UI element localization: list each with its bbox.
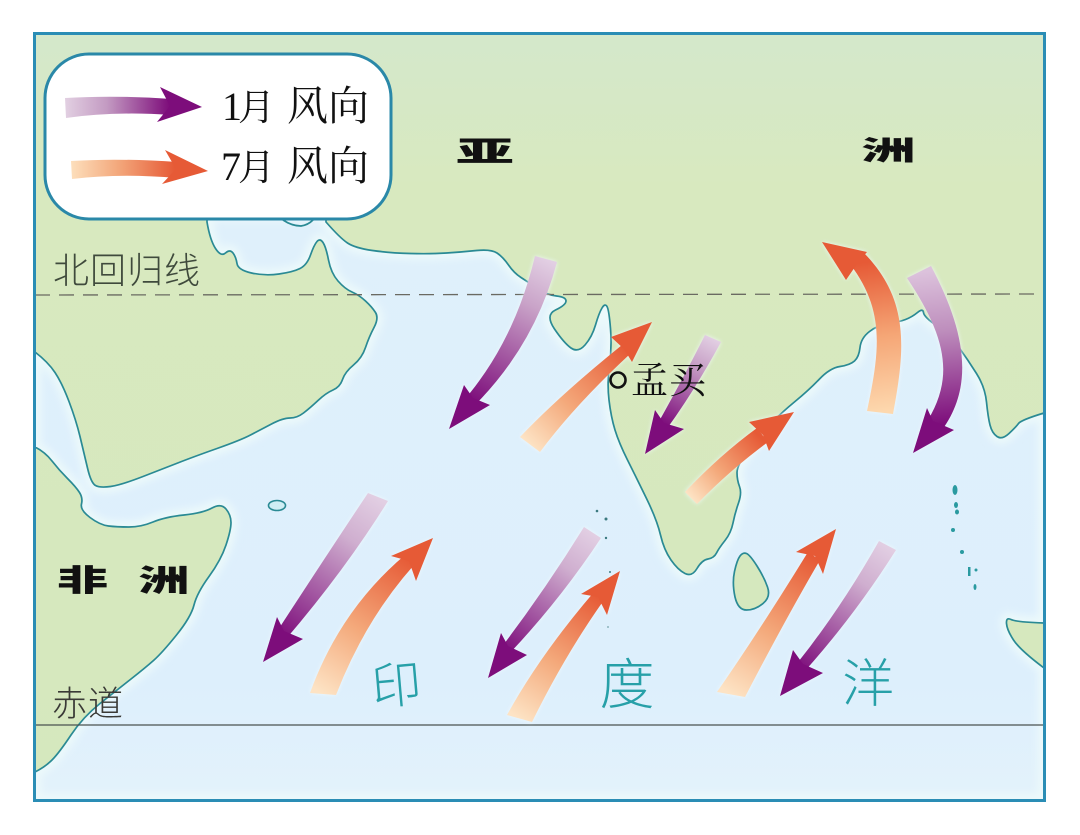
island: Socotra — [268, 500, 286, 510]
arrow: January wind, Arabian Sea north — [449, 256, 557, 429]
arrow: January wind, central Indian Ocean — [488, 527, 601, 678]
legend text: July wind direction: 风向 — [287, 143, 369, 189]
label: Africa: 洲 — [138, 564, 190, 597]
arrow: July wind curving into Bay of Bengal north — [822, 242, 901, 414]
panel: legend — [45, 54, 391, 219]
arrow: July wind, west Indian Ocean — [310, 538, 433, 695]
islands: Laccadive dots — [596, 510, 611, 628]
arrow: July wind toward Mumbai — [520, 322, 652, 452]
marker: Mumbai — [610, 372, 626, 388]
arrow: January wind curving down Bay of Bengal east — [907, 266, 962, 453]
label: Asia (right glyph): 洲 — [861, 136, 916, 166]
islands: Andaman and Nicobar — [951, 485, 978, 590]
arrow: January wind, east Indian Ocean — [780, 541, 896, 696]
legend text: July wind direction: 月 — [238, 148, 275, 189]
legend arrow: January wind — [65, 87, 202, 122]
label: Indian Ocean (印): 印 — [369, 656, 424, 716]
legend text: July wind direction: 7 — [221, 144, 241, 189]
arrow: January wind over India — [645, 335, 721, 454]
arrow: January wind, west Indian Ocean — [263, 493, 388, 662]
legend arrow: July wind — [71, 150, 208, 184]
label: Africa — [57, 564, 190, 597]
equator line — [35, 724, 1043, 726]
legend text: January wind direction: 月 — [238, 88, 275, 129]
label: tropic of cancer: 北回归线 — [53, 250, 200, 291]
label: Indian Ocean (度): 度 — [599, 654, 655, 716]
tropic of cancer dashed line — [35, 294, 1043, 295]
legend text: January wind direction: 风向 — [287, 83, 369, 129]
arrow: July wind across India — [685, 412, 794, 504]
arrow: July wind, east Indian Ocean — [717, 529, 836, 697]
arrow: July wind, central Indian Ocean — [507, 571, 620, 722]
label: equator: 赤道 — [52, 685, 123, 724]
label: Mumbai: 孟买 — [631, 361, 707, 402]
legend text: January wind direction: 1 — [222, 84, 242, 129]
ocean and coastline — [35, 215, 1044, 800]
label: Asia (left glyph): 亚 — [456, 136, 514, 167]
island: Sri Lanka — [733, 553, 769, 610]
label: Africa: 非 — [57, 564, 108, 597]
label: Indian Ocean (洋): 洋 — [842, 656, 894, 714]
